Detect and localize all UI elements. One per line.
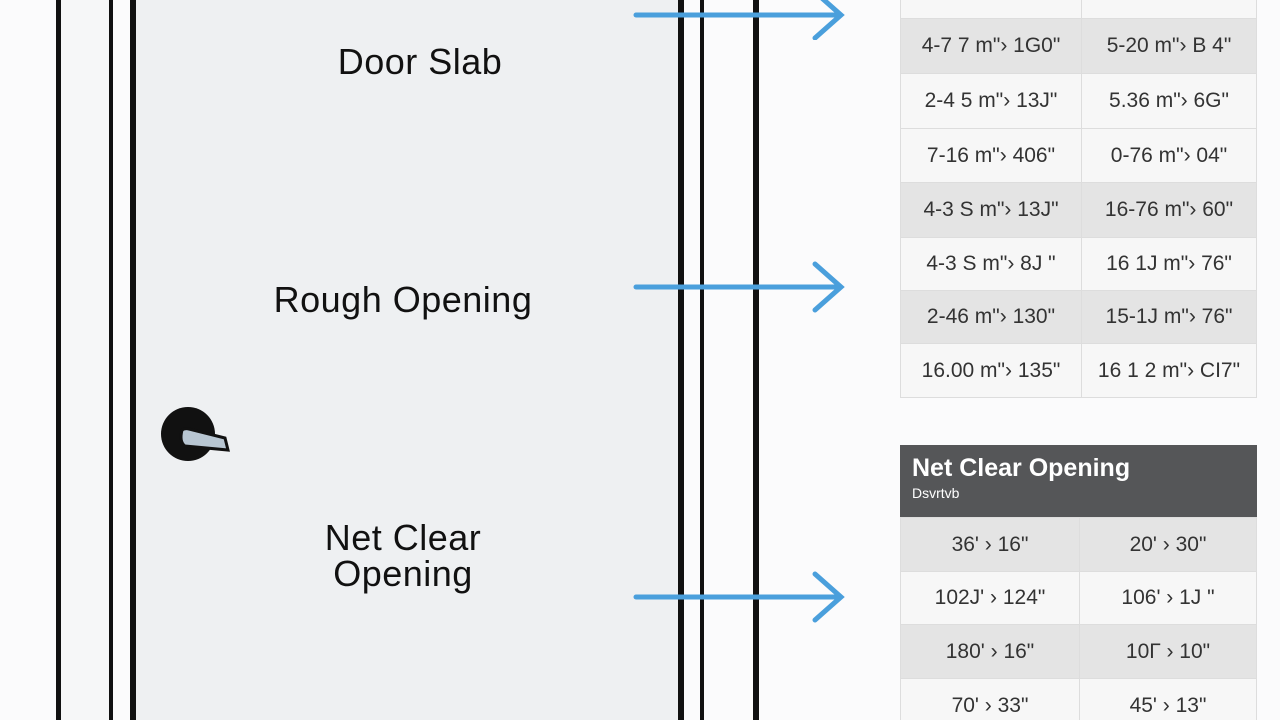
panel: Net Clear Opening table (900, 445, 1257, 720)
table: dimensions: 4-3 S m"› 13J" (923, 198, 1059, 221)
table: dimensions: 16 1 2 m"› CI7" (1098, 358, 1240, 382)
table: dimensions: 2-4 5 m"› 13J" (925, 89, 1057, 112)
table: dimensions: 0-76 m"› 04" (1111, 144, 1227, 166)
arrow: rough opening (634, 262, 845, 312)
table header: Dsvrtvb (912, 485, 959, 501)
table: dimensions (900, 0, 1257, 398)
table: dimensions: 7-16 m"› 406" (927, 144, 1055, 166)
label: Door Slab: Door Slab (338, 41, 502, 82)
arrow: door slab (634, 0, 845, 40)
table: dimensions: 16.00 m"› 135" (922, 358, 1060, 382)
table rows: 36' › 16" (952, 532, 1028, 556)
label: Net Clear Opening: Opening (333, 553, 473, 594)
arrow: net clear opening (634, 572, 845, 622)
table rows: 106' › 1J " (1121, 586, 1215, 609)
table rows: 180' › 16" (946, 640, 1034, 662)
table: dimensions: 15-1J m"› 76" (1106, 305, 1232, 328)
label: Rough Opening: Rough Opening (274, 279, 532, 320)
table: dimensions: 16-76 m"› 60" (1105, 198, 1233, 221)
label: Net Clear Opening (325, 517, 481, 594)
table: dimensions: 5.36 m"› 6G" (1109, 89, 1229, 112)
table header (900, 445, 1257, 517)
table: dimensions: 16 1J m"› 76" (1106, 252, 1232, 275)
table rows (900, 517, 1257, 720)
icon: door handle (161, 407, 230, 461)
table rows: 20' › 30" (1130, 532, 1206, 556)
table: dimensions: 4-3 S m"› 8J " (926, 252, 1056, 275)
table header: Net Clear Opening (912, 454, 1130, 482)
table: dimensions: 2-46 m"› 130" (927, 305, 1055, 328)
table rows: 10Г › 10" (1126, 640, 1210, 662)
table: dimensions: 4-7 7 m"› 1G0" (922, 34, 1060, 57)
table rows: 45' › 13" (1130, 694, 1206, 716)
door slab panel (136, 0, 678, 720)
door frame diagram (56, 0, 759, 720)
label: Net Clear Opening: Net Clear (325, 517, 481, 558)
table rows: 102J' › 124" (935, 586, 1045, 609)
table: dimensions: 5-20 m"› B 4" (1107, 34, 1231, 57)
table rows: 70' › 33" (952, 694, 1028, 716)
